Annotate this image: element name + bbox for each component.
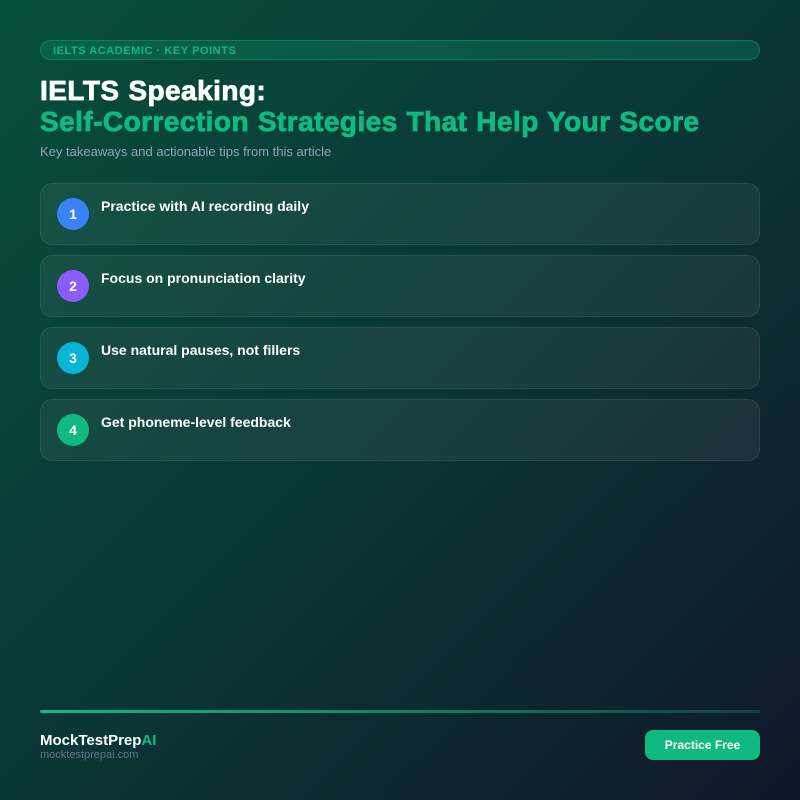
point text 4: Get phoneme-level feedback: [101, 414, 291, 430]
point text 2: Focus on pronunciation clarity: [101, 270, 306, 286]
point text 3: Use natural pauses, not fillers: [101, 342, 300, 358]
subtitle: Key takeaways and actionable tips from this article: [40, 144, 331, 159]
number badge 2: [57, 270, 89, 302]
panel: key point 2: [40, 255, 760, 317]
brand name: MockTestPrepAI: [40, 732, 156, 749]
title: [40, 75, 699, 138]
number badge 4: 4: [69, 422, 77, 438]
number badge 4: [57, 414, 89, 446]
brand url: mocktestprepai.com: [40, 749, 138, 761]
divider bar: [40, 710, 760, 713]
panel: key point 4: [40, 399, 760, 461]
number badge 2: 2: [69, 278, 77, 294]
panel: key point 1: [40, 183, 760, 245]
point text 1: Practice with AI recording daily: [101, 198, 309, 214]
number badge 1: 1: [69, 206, 77, 222]
number badge 1: [57, 198, 89, 230]
number badge 3: 3: [69, 350, 77, 366]
brand block: [40, 732, 156, 761]
button: practice free: [645, 730, 760, 760]
badge: category label: [40, 40, 760, 60]
title: Self-Correction Strategies That Help Your Score: [40, 106, 699, 137]
badge: category label: IELTS ACADEMIC · KEY POINTS: [53, 45, 236, 57]
title: IELTS Speaking:: [40, 75, 266, 106]
button: practice free: Practice Free: [665, 738, 740, 752]
number badge 3: [57, 342, 89, 374]
panel: key point 3: [40, 327, 760, 389]
